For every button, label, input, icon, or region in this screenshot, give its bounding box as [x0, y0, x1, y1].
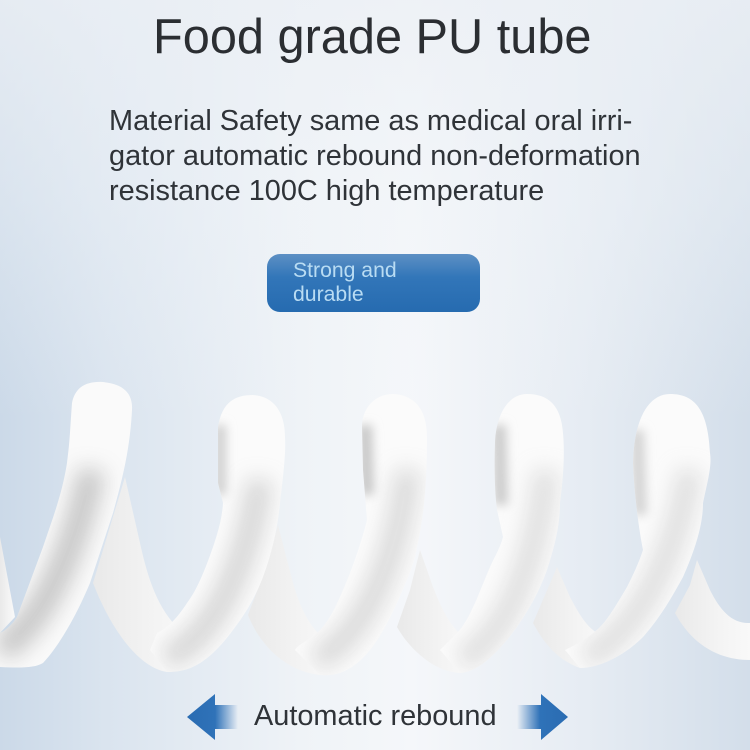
coiled white PU tube — [0, 382, 750, 740]
back strands of the coil — [0, 477, 750, 675]
coil strand 4 — [461, 394, 564, 666]
description text block — [109, 105, 641, 207]
badge: strong and durable — [267, 254, 480, 312]
left arrow — [187, 694, 238, 740]
description text block: resistance 100C high temperature — [109, 175, 544, 207]
badge: strong and durable: durable — [293, 283, 364, 306]
badge: strong and durable: Strong and — [293, 259, 397, 282]
coil strand 1 — [0, 382, 132, 668]
description text block: gator automatic rebound non-deformation — [109, 140, 641, 172]
coil strand 3 — [314, 395, 424, 669]
caption: automatic rebound: Automatic rebound — [254, 700, 497, 732]
coil strand 2 — [164, 395, 285, 672]
description text block: Material Safety same as medical oral irri- — [109, 105, 632, 137]
coil strand 5 — [565, 394, 711, 668]
right arrow — [517, 694, 568, 740]
title: Food grade PU tube — [153, 10, 591, 64]
